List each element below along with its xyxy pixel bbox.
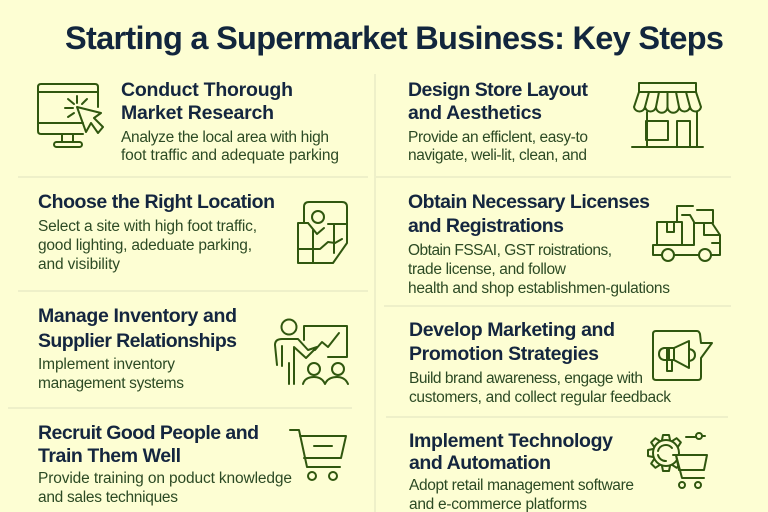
heading: Implement Technology <box>409 430 613 452</box>
description: Obtain FSSAI, GST roistrations, <box>408 242 612 259</box>
description: Implement inventory <box>38 356 175 373</box>
panel: technology <box>409 430 707 512</box>
icon: map with pin <box>298 202 347 263</box>
description: management systems <box>38 375 184 392</box>
icon: monitor with cursor <box>38 84 103 147</box>
title: Starting a Supermarket Business: Key Steps <box>65 20 724 56</box>
description: Adopt retail management software <box>409 477 634 494</box>
description <box>408 242 670 297</box>
icon: storefront <box>632 83 703 147</box>
heading: Supplier Relationships <box>38 330 237 352</box>
heading: Design Store Layout <box>408 79 588 101</box>
heading: Develop Marketing and <box>409 319 615 341</box>
heading <box>38 422 259 467</box>
heading <box>409 319 615 365</box>
heading: Recruit Good People and <box>38 422 259 444</box>
description: health and shop establishmen-gulations <box>408 280 670 297</box>
description: Build brand awareness, engage with <box>409 370 643 387</box>
heading: Obtain Necessary Licenses <box>408 191 650 213</box>
description: foot traffic and adequate parking <box>121 147 339 164</box>
heading: Conduct Thorough <box>121 79 293 101</box>
description <box>409 477 634 512</box>
description: navigate, weli-lit, clean, and <box>408 147 587 164</box>
heading <box>408 79 588 124</box>
description <box>409 370 671 406</box>
heading <box>121 79 293 124</box>
panel: location <box>38 191 347 273</box>
heading: Choose the Right Location <box>38 191 275 213</box>
heading: and Aesthetics <box>408 102 542 124</box>
panel: recruit <box>38 422 346 506</box>
description: Analyze the local area with high <box>121 129 329 146</box>
heading <box>408 191 650 237</box>
panel: store layout <box>408 79 703 164</box>
icon: presenter with chart <box>275 320 348 384</box>
heading <box>38 305 237 352</box>
panel: marketing <box>409 319 712 406</box>
heading: and Registrations <box>408 215 564 237</box>
description: trade license, and follow <box>408 261 567 278</box>
icon: shopping cart <box>290 430 346 480</box>
description <box>38 356 184 392</box>
panel: market research <box>38 79 339 164</box>
description: good lighting, adeduate parking, <box>38 237 252 254</box>
description: and visibility <box>38 256 120 273</box>
panel: licenses <box>408 191 720 297</box>
description <box>121 129 339 164</box>
icon: megaphone in speech bubble <box>653 331 712 380</box>
heading: Train Them Well <box>38 445 181 467</box>
panel: inventory <box>38 305 348 392</box>
heading <box>409 430 613 474</box>
heading: Manage Inventory and <box>38 305 237 327</box>
description: customers, and collect regular feedback <box>409 389 671 406</box>
heading: and Automation <box>409 452 551 474</box>
description <box>38 218 257 273</box>
description <box>408 129 588 164</box>
description: Provide an efficlent, easy-to <box>408 129 588 146</box>
description: Provide training on poduct knowledge <box>38 470 292 487</box>
icon: delivery truck <box>653 206 720 261</box>
heading: Market Research <box>121 102 274 124</box>
description: Select a site with high foot traffic, <box>38 218 257 235</box>
heading: Promotion Strategies <box>409 343 599 365</box>
description <box>38 470 292 506</box>
description: and sales techniques <box>38 489 178 506</box>
icon: gear and cart <box>648 433 707 488</box>
